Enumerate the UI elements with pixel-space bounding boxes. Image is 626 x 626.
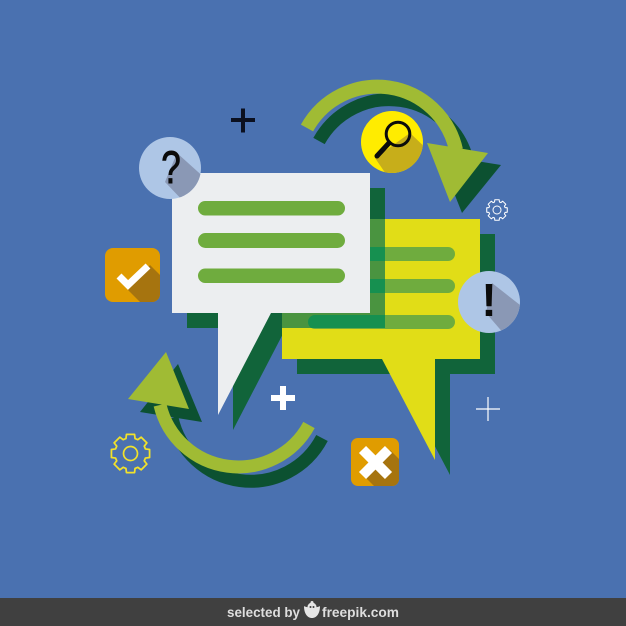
- icon: cross tile: [351, 438, 401, 488]
- icon: exclamation mark badge: !: [481, 274, 497, 326]
- yellow bubble text lines: [308, 247, 455, 329]
- icon: bold white plus: [271, 386, 295, 410]
- white bubble shadow: [187, 188, 385, 430]
- white bubble body: [172, 173, 370, 415]
- icon: exclamation mark badge: [458, 271, 520, 333]
- overlap shade on yellow bubble: [282, 219, 385, 328]
- white speech bubble: [172, 173, 370, 415]
- yellow speech bubble: [187, 188, 495, 475]
- icon: yellow gear: [111, 434, 150, 473]
- white bubble text lines: [198, 201, 345, 283]
- bottom arrow shadow: [140, 364, 322, 481]
- footer text: selected by: selected by: [227, 605, 300, 620]
- icon: question mark badge: [139, 137, 201, 199]
- icon: black plus: [231, 108, 255, 132]
- yellow bubble body: [282, 219, 480, 460]
- yellow bubble shadow: [297, 234, 495, 475]
- bottom curved arrow: [128, 352, 322, 481]
- bottom arrow body: [128, 352, 309, 467]
- top curved arrow: [307, 87, 501, 213]
- top arrow body: [307, 87, 488, 202]
- footer text: freepik.com: freepik.com: [322, 605, 399, 620]
- icon: thin white plus: [476, 397, 500, 421]
- footer bar: [0, 598, 626, 626]
- top arrow shadow: [319, 100, 501, 213]
- icon: white gear: [487, 200, 507, 220]
- icon: freepik logo: [304, 601, 320, 618]
- icon: question mark badge: ?: [161, 142, 181, 193]
- icon: magnifier badge: [361, 111, 423, 173]
- icon: check mark tile: [105, 248, 162, 304]
